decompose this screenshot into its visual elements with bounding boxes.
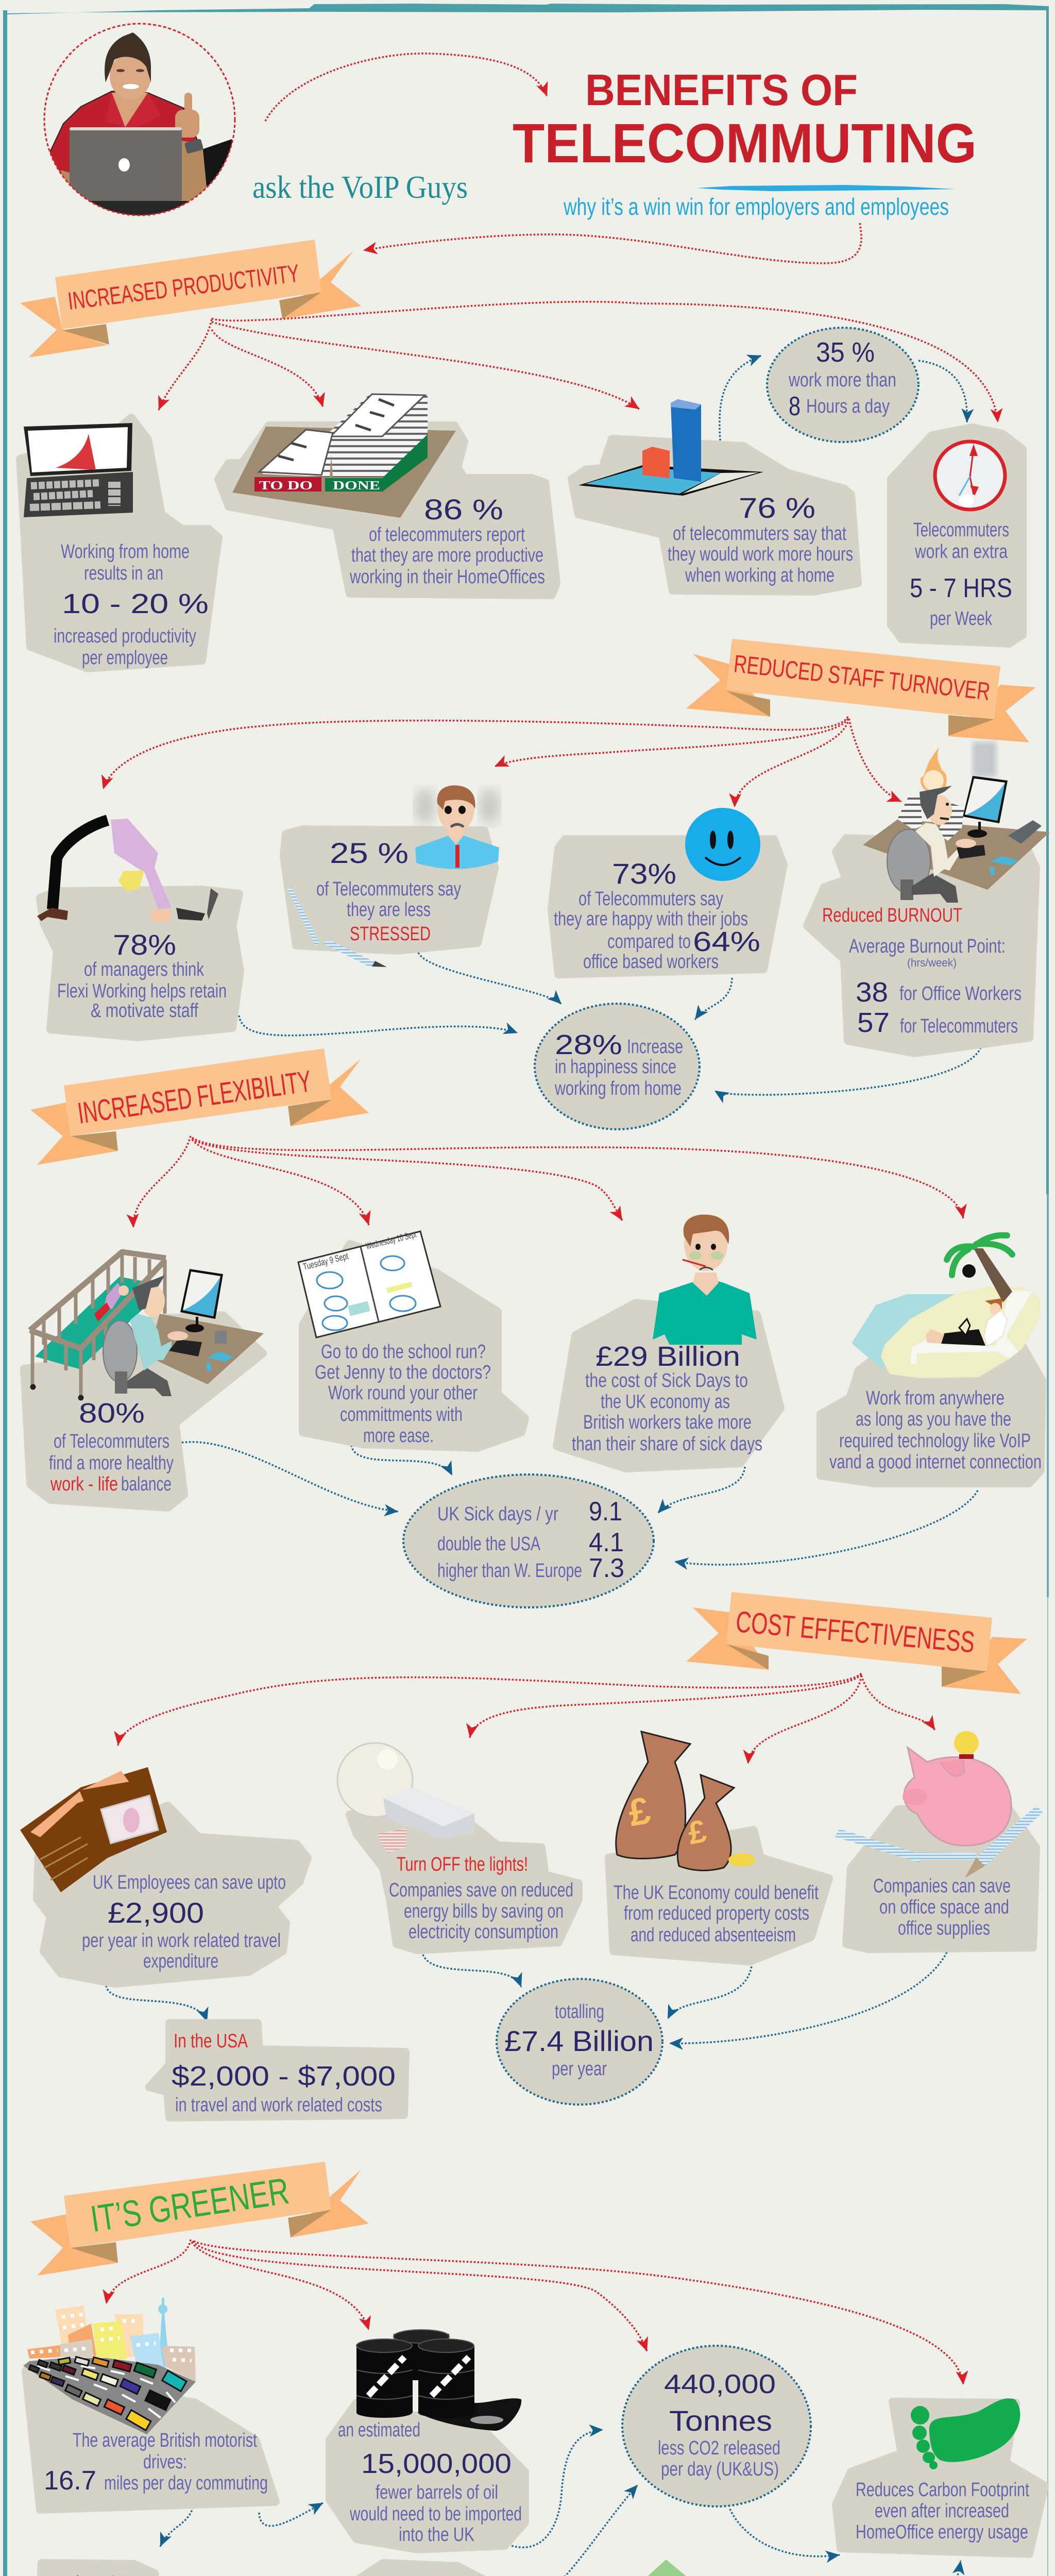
icon: money bags: £ [685, 1814, 709, 1852]
text: school run: more ease. [363, 1425, 434, 1447]
panel: 440,000 tonnes oval: Tonnes [669, 2404, 772, 2437]
text: 80 percent stat: balance [121, 1473, 172, 1495]
panel: clock extra hours [891, 428, 1023, 643]
text: burnout stats: for Office Workers [899, 983, 1022, 1005]
subtitle: why it’s a win win for employers and employees [563, 193, 949, 220]
subtitle underline stroke [696, 185, 956, 191]
text: 78 percent stat: & motivate staff [91, 1000, 198, 1022]
text: uk savings stat: UK Employees can save upto [93, 1872, 286, 1893]
panel: 35 percent oval: 35 % [816, 337, 875, 368]
icon: money bags [616, 1732, 755, 1871]
text: office savings [873, 1875, 1011, 1939]
icon: parent at desk by crib [30, 1252, 264, 1400]
text: motorist stat [44, 2430, 268, 2496]
text: sick day cost: British workers take more [583, 1412, 752, 1433]
panel: work from anywhere [821, 1235, 1042, 1483]
text: office savings: on office space and [879, 1896, 1009, 1918]
panel: 35 percent oval [767, 328, 918, 442]
text: 86 percent stat: of telecommuters report [369, 524, 525, 546]
text: economy benefit [614, 1882, 819, 1946]
text: 73 percent stat: 73% [612, 857, 676, 890]
panel: to do done 86 percent [218, 393, 556, 595]
text: sick day cost: the UK economy as [601, 1391, 730, 1413]
panel: reduced burnout [807, 742, 1050, 1053]
icon: laptop with chart [24, 423, 133, 517]
text: school run [315, 1341, 491, 1447]
icon: piggy bank and pencils [835, 1731, 1043, 1878]
brand tagline: ask the VoIP Guys [252, 170, 468, 205]
panel: uk sick days oval: UK Sick days / yr [437, 1503, 558, 1525]
text: economy benefit: and reduced absenteeism [631, 1924, 796, 1946]
icon: wall clock [935, 442, 1005, 510]
text: motorist stat: 16.7 [44, 2466, 96, 2496]
panel: tablet 76 percent [572, 399, 858, 591]
text: lights savings: Companies save on reduced [389, 1879, 573, 1901]
panel: uk sick days oval [403, 1475, 654, 1607]
text: 78 percent stat: of managers think [84, 959, 205, 980]
icon: burnt out worker at desk [863, 742, 1050, 903]
text: economy benefit: from reduced property costs [624, 1903, 809, 1924]
text: economy benefit: The UK Economy could benefit [614, 1882, 819, 1904]
panel: working from home productivity [20, 418, 218, 669]
panel: usa savings: in travel and work related costs [175, 2094, 382, 2116]
icon: wallet with banknotes [20, 1767, 167, 1892]
text: school run: Go to do the school run? [321, 1341, 486, 1363]
icon: open diary [298, 1229, 440, 1337]
panel: uk sick days oval: 9.1 [589, 1497, 622, 1527]
text: 78 percent stat [57, 928, 227, 1022]
text: 78 percent stat: 78% [113, 928, 176, 961]
text: 73 percent stat: they are happy with their jobs [554, 908, 748, 930]
panel: 15 million barrels [330, 2330, 525, 2549]
text: burnout stats: Average Burnout Point: [849, 936, 1006, 957]
text: office savings: office supplies [898, 1918, 990, 1939]
banner: increased flexibility [30, 1048, 369, 1165]
panel: 440,000 tonnes oval: per day (UK&US) [661, 2459, 779, 2480]
arrows: flexibility [133, 1136, 978, 1565]
text: footprint: even after increased [875, 2500, 1009, 2522]
icon: city traffic [23, 2298, 196, 2434]
text: extra hours stat: Telecommuters [913, 519, 1009, 541]
text: motorist stat: The average British motorist [73, 2430, 257, 2451]
text: work from anywhere [829, 1387, 1042, 1473]
text: 25 percent stat: 25 % [330, 837, 409, 869]
icon: oil barrels and spill [356, 2330, 521, 2431]
text: sick day cost [572, 1341, 762, 1455]
arrow: subtitle to first banner [363, 223, 861, 263]
text: 80 percent stat: work - life [50, 1473, 118, 1495]
icon: tablet with bar chart [578, 399, 763, 496]
panel: 28 percent oval [535, 1004, 700, 1129]
title: benefits of telecommuting: TELECOMMUTING [513, 112, 977, 174]
panel: 35 percent oval: work more than [788, 369, 896, 391]
text: 73 percent stat: of Telecommuters say [578, 888, 723, 910]
panel: 440,000 tonnes oval: less CO2 released [658, 2437, 780, 2459]
text: uk savings stat: £2,900 [108, 1896, 204, 1929]
text: 86 percent stat [349, 493, 545, 588]
text: extra hours stat: 5 - 7 HRS [910, 573, 1012, 603]
panel: usa savings: In the USA [174, 2030, 248, 2052]
panel: 28 percent oval: 28% [555, 1029, 622, 1060]
text: burnout stats: 57 [857, 1007, 890, 1038]
icon: open diary: Tuesday 9 Sept [302, 1251, 349, 1272]
icon: sick man with thermometer [653, 1214, 757, 1345]
icon: stressed man and pencil [287, 785, 500, 968]
panel: school run [298, 1229, 525, 1448]
panel: uk sick days oval: 4.1 [589, 1528, 624, 1557]
icon: stacks of to do and done paperwork [232, 393, 456, 518]
panel: uk sick days oval: higher than W. Europe [437, 1560, 582, 1582]
text: 73 percent stat: office based workers [583, 951, 719, 973]
text: lights savings: energy bills by saving on [404, 1901, 564, 1922]
panel: british motorist commute [23, 2298, 276, 2510]
panel: 7.4 billion oval [497, 1979, 662, 2105]
panel: 7.4 billion oval: per year [552, 2058, 607, 2080]
text: uk savings stat [82, 1872, 286, 1972]
text: 25 percent stat [316, 837, 461, 945]
text: 78 percent stat: Flexi Working helps retain [57, 980, 227, 1002]
text: productivity stat: 10 - 20 % [62, 588, 209, 619]
text: 76 percent stat: 76 % [739, 492, 815, 524]
text: 76 percent stat: of telecommuters say that [673, 523, 846, 545]
text: 76 percent stat [668, 492, 853, 586]
title: benefits of telecommuting: BENEFITS OF [585, 66, 858, 115]
arrows: productivity [159, 302, 998, 451]
icon: money bags: £ [625, 1789, 653, 1835]
panel: uk sick days oval: double the USA [437, 1533, 540, 1555]
panel: 28 percent oval: working from home [554, 1078, 682, 1099]
panel: 7.4 billion oval: £7.4 Billion [504, 2025, 654, 2057]
text: footprint [856, 2479, 1029, 2543]
icon: green house [624, 2560, 712, 2576]
icon: open diary: Wednesday 10 Sept [365, 1229, 417, 1251]
text: 25 percent stat: STRESSED [350, 923, 431, 945]
panel: uk economy benefit [609, 1732, 829, 1961]
panel: 35 percent oval: Hours a day [806, 396, 890, 417]
text: sick day cost: £29 Billion [595, 1341, 740, 1372]
panel: 28 percent oval: Increase [627, 1036, 683, 1058]
banner: increased flexibility: INCREASED FLEXIBILITY [76, 1064, 313, 1130]
text: burnout stats: 38 [856, 977, 888, 1008]
text: 76 percent stat: when working at home [685, 565, 835, 586]
banner: increased productivity [20, 240, 361, 358]
text: 86 percent stat: that they are more productive [351, 545, 543, 566]
text: burnout stats [822, 905, 1022, 1038]
text: barrels uk stat: fewer barrels of oil [376, 2482, 498, 2503]
text: 80 percent stat: 80% [79, 1398, 145, 1429]
text: productivity stat: per employee [82, 647, 168, 669]
text: office savings: Companies can save [873, 1875, 1011, 1897]
panel: 35 percent oval: 8 [789, 392, 801, 421]
banner: reduced staff turnover [686, 639, 1036, 742]
icon: stacks of to do and done paperwork: DONE [333, 479, 380, 493]
text: barrels uk stat: an estimated [338, 2419, 420, 2441]
banner: it's greener: IT’S GREENER [88, 2171, 292, 2240]
icon: yoga bend woman with laptop [37, 819, 218, 922]
text: extra hours stat [910, 519, 1012, 630]
text: 86 percent stat: working in their HomeOffices [349, 566, 545, 588]
arrows: staff turnover [103, 717, 981, 1095]
panel: uk sick days oval: 7.3 [589, 1553, 624, 1583]
text: barrels uk stat [338, 2419, 522, 2546]
text: uk savings stat: expenditure [143, 1951, 218, 1972]
icon: green footprint [911, 2398, 1020, 2469]
text: work from anywhere: Work from anywhere [866, 1387, 1005, 1409]
photo: presenter with laptop [41, 24, 237, 222]
text: productivity stat: increased productivity [54, 625, 196, 647]
banner: cost effectiveness [686, 1592, 1027, 1694]
text: uk savings stat: per year in work related travel [82, 1930, 281, 1952]
panel: 28 percent oval: in happiness since [555, 1056, 676, 1078]
text: sick day cost: the cost of Sick Days to [585, 1370, 748, 1392]
text: 80 percent stat [49, 1398, 174, 1495]
icon: beach with palm and laptop [852, 1235, 1041, 1378]
text: 25 percent stat: of Telecommuters say [316, 878, 461, 900]
panel: usa savings: $2,000 - $7,000 [172, 2061, 396, 2092]
text: 80 percent stat: find a more healthy [49, 1452, 174, 1474]
text: productivity stat [54, 541, 209, 669]
banner: it's greener [30, 2162, 369, 2276]
text: extra hours stat: work an extra [914, 541, 1008, 563]
panel: 7.4 billion oval: totalling [555, 2001, 604, 2023]
icon: stacks of to do and done paperwork: TO DO [259, 479, 313, 493]
text: lights savings [389, 1854, 573, 1943]
text: school run: committments with [340, 1404, 463, 1426]
title: benefits of telecommuting [513, 66, 977, 174]
panel: 440,000 tonnes oval [622, 2346, 811, 2506]
banner: increased productivity: INCREASED PRODUCTIVITY [66, 260, 301, 315]
panel: office supplies savings [835, 1731, 1043, 1949]
text: 25 percent stat: they are less [347, 899, 431, 921]
panel: managers flexi working [37, 819, 240, 1037]
text: barrels uk stat: 15,000,000 [361, 2448, 512, 2479]
panel: 587 million barrels [343, 2563, 540, 2576]
text: productivity stat: results in an [84, 563, 163, 584]
arrows: greener [106, 2240, 963, 2576]
panel: homes powered [591, 2560, 821, 2576]
text: lights savings: Turn OFF the lights! [397, 1854, 528, 1875]
panel: 440,000 tonnes oval: 440,000 [664, 2369, 776, 2399]
text: barrels uk stat: into the UK [399, 2524, 474, 2546]
panel: usa commute [40, 2563, 288, 2576]
text: 73 percent stat [554, 857, 760, 973]
text: productivity stat: Working from home [61, 541, 190, 563]
icon: light bulb and money [337, 1743, 474, 1853]
panel: happy with jobs [552, 808, 784, 974]
text: motorist stat: miles per day commuting [104, 2472, 268, 2494]
panel: employee travel savings [20, 1767, 308, 1984]
text: 73 percent stat: 64% [693, 926, 760, 957]
panel: work life balance [24, 1252, 264, 1507]
text: 80 percent stat: of Telecommuters [54, 1431, 169, 1452]
panel: usa savings [149, 2023, 405, 2117]
panel: turn off the lights [337, 1743, 578, 1950]
text: sick day cost: than their share of sick days [572, 1433, 762, 1455]
text: 86 percent stat: 86 % [424, 493, 503, 526]
text: lights savings: electricity consumption [409, 1921, 558, 1943]
text: burnout stats: (hrs/week) [907, 956, 957, 969]
text: 73 percent stat: compared to [607, 931, 691, 953]
arrows: cost [106, 1673, 948, 2043]
panel: less stressed [284, 785, 500, 968]
text: burnout stats: Reduced BURNOUT [822, 905, 962, 926]
arrow: photo to title [265, 54, 547, 121]
text: motorist stat: drives: [143, 2451, 187, 2473]
panel: carbon footprint [836, 2398, 1045, 2554]
text: school run: Work round your other [328, 1382, 478, 1404]
panel: sick day cost [557, 1214, 780, 1468]
text: 76 percent stat: they would work more hours [668, 544, 853, 565]
text: extra hours stat: per Week [930, 608, 993, 630]
text: barrels uk stat: would need to be imported [349, 2503, 522, 2525]
text: school run: Get Jenny to the doctors? [315, 1362, 491, 1383]
icon: blue smiley [685, 808, 760, 881]
